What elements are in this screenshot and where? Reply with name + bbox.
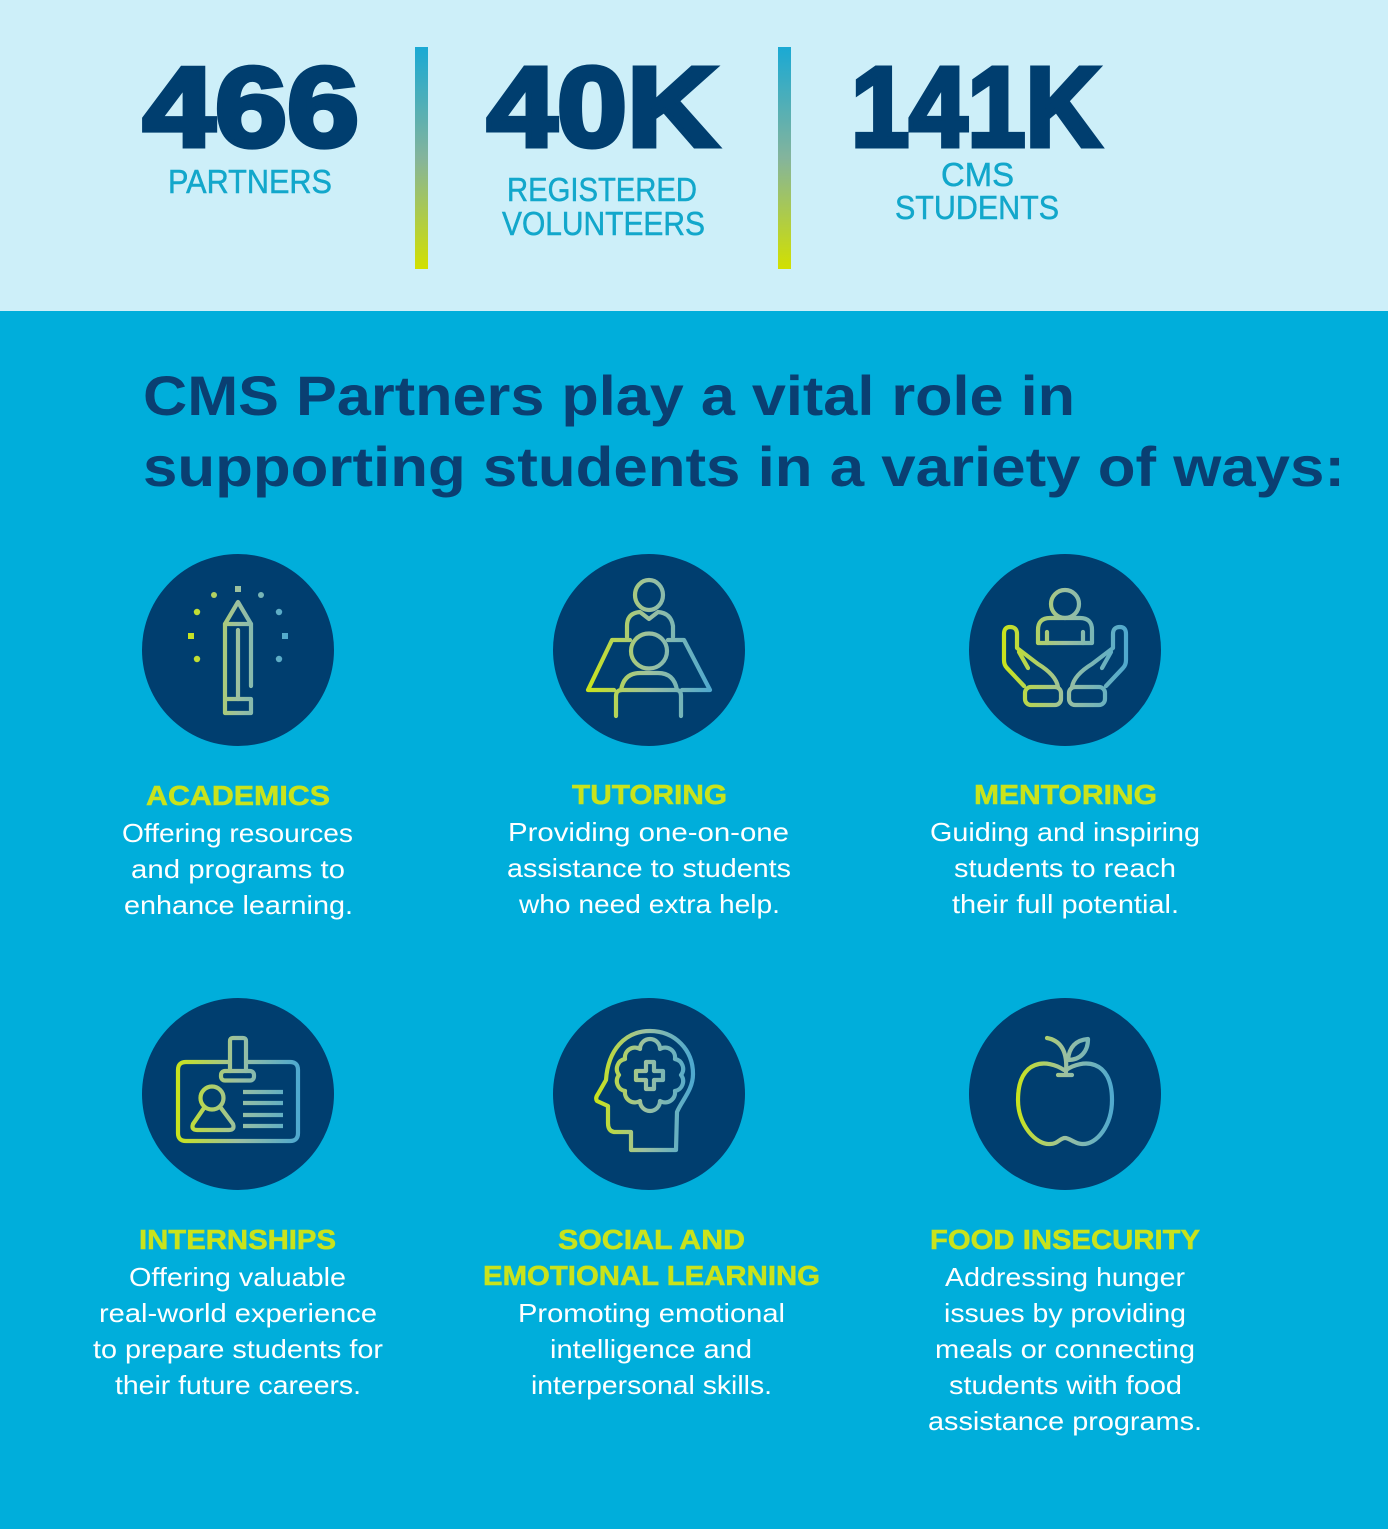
text: food insecurity description: issues by providing xyxy=(944,1298,1186,1328)
icon: hands holding person xyxy=(969,554,1161,746)
title: social and emotional learning: SOCIAL AND xyxy=(558,1224,745,1255)
stat divider 2 xyxy=(778,47,791,269)
title: academics: ACADEMICS xyxy=(146,780,330,811)
text: academics description xyxy=(122,818,353,920)
panel: internships xyxy=(93,998,383,1400)
text: social and emotional description: intelligence and xyxy=(550,1334,752,1364)
text: mentoring description: students to reach xyxy=(954,853,1176,883)
stat: 141K CMS students: STUDENTS xyxy=(895,189,1059,226)
stat: 141K CMS students: CMS xyxy=(941,156,1014,193)
title: food insecurity: FOOD INSECURITY xyxy=(930,1224,1200,1255)
stat: 141K CMS students xyxy=(851,44,1101,226)
panel: food insecurity xyxy=(928,998,1202,1436)
text: food insecurity description: assistance programs. xyxy=(928,1406,1202,1436)
stat: 40K registered volunteers: 40K xyxy=(487,44,718,170)
icon: apple xyxy=(969,998,1161,1190)
text: academics description: Offering resources xyxy=(122,818,353,848)
text: food insecurity description xyxy=(928,1262,1202,1436)
title: tutoring: TUTORING xyxy=(572,779,727,810)
icon: head with brain and plus xyxy=(553,998,745,1190)
heading: CMS Partners play a vital role in xyxy=(143,364,1075,427)
panel: mentoring xyxy=(930,554,1200,919)
panel: statistics band xyxy=(0,0,1388,311)
text: tutoring description: assistance to students xyxy=(507,853,791,883)
text: food insecurity description: Addressing hunger xyxy=(945,1262,1185,1292)
stat: 40K registered volunteers: REGISTERED xyxy=(507,171,697,208)
text: internships description: Offering valuable xyxy=(129,1262,346,1292)
panel: academics xyxy=(122,554,353,920)
text: mentoring description xyxy=(930,817,1200,919)
stat: 466 partners: 466 xyxy=(143,44,359,170)
icon: pencil xyxy=(142,554,334,746)
text: tutoring description: Providing one-on-one xyxy=(508,817,789,847)
text: tutoring description: who need extra help. xyxy=(518,889,780,919)
text: academics description: and programs to xyxy=(131,854,345,884)
stat: 141K CMS students: 141K xyxy=(851,44,1101,170)
main background xyxy=(0,311,1388,1529)
text: social and emotional description xyxy=(518,1298,785,1400)
stat: 40K registered volunteers xyxy=(487,44,718,242)
panel: social and emotional learning xyxy=(483,998,820,1400)
text: internships description xyxy=(93,1262,383,1400)
title: social and emotional learning: EMOTIONAL LEARNING xyxy=(483,1260,820,1291)
heading xyxy=(143,364,1345,498)
icon: ID badge xyxy=(142,998,334,1190)
stat divider 1 xyxy=(415,47,428,269)
text: internships description: to prepare students for xyxy=(93,1334,383,1364)
panel: tutoring xyxy=(507,554,791,919)
text: internships description: real-world experience xyxy=(99,1298,377,1328)
stat: 466 partners: PARTNERS xyxy=(168,163,332,200)
text: mentoring description: their full potential. xyxy=(952,889,1179,919)
text: tutoring description xyxy=(507,817,791,919)
text: food insecurity description: students with food xyxy=(949,1370,1182,1400)
text: mentoring description: Guiding and inspiring xyxy=(930,817,1200,847)
text: academics description: enhance learning. xyxy=(124,890,353,920)
title: social and emotional learning xyxy=(483,1224,820,1291)
stat: 40K registered volunteers: VOLUNTEERS xyxy=(502,205,705,242)
icon: tutor and student at table xyxy=(553,554,745,746)
title: internships: INTERNSHIPS xyxy=(139,1224,336,1255)
text: social and emotional description: interpersonal skills. xyxy=(531,1370,772,1400)
text: food insecurity description: meals or connecting xyxy=(935,1334,1195,1364)
text: social and emotional description: Promoting emotional xyxy=(518,1298,785,1328)
text: internships description: their future careers. xyxy=(115,1370,361,1400)
heading: supporting students in a variety of ways: xyxy=(143,435,1345,498)
title: mentoring: MENTORING xyxy=(974,779,1157,810)
